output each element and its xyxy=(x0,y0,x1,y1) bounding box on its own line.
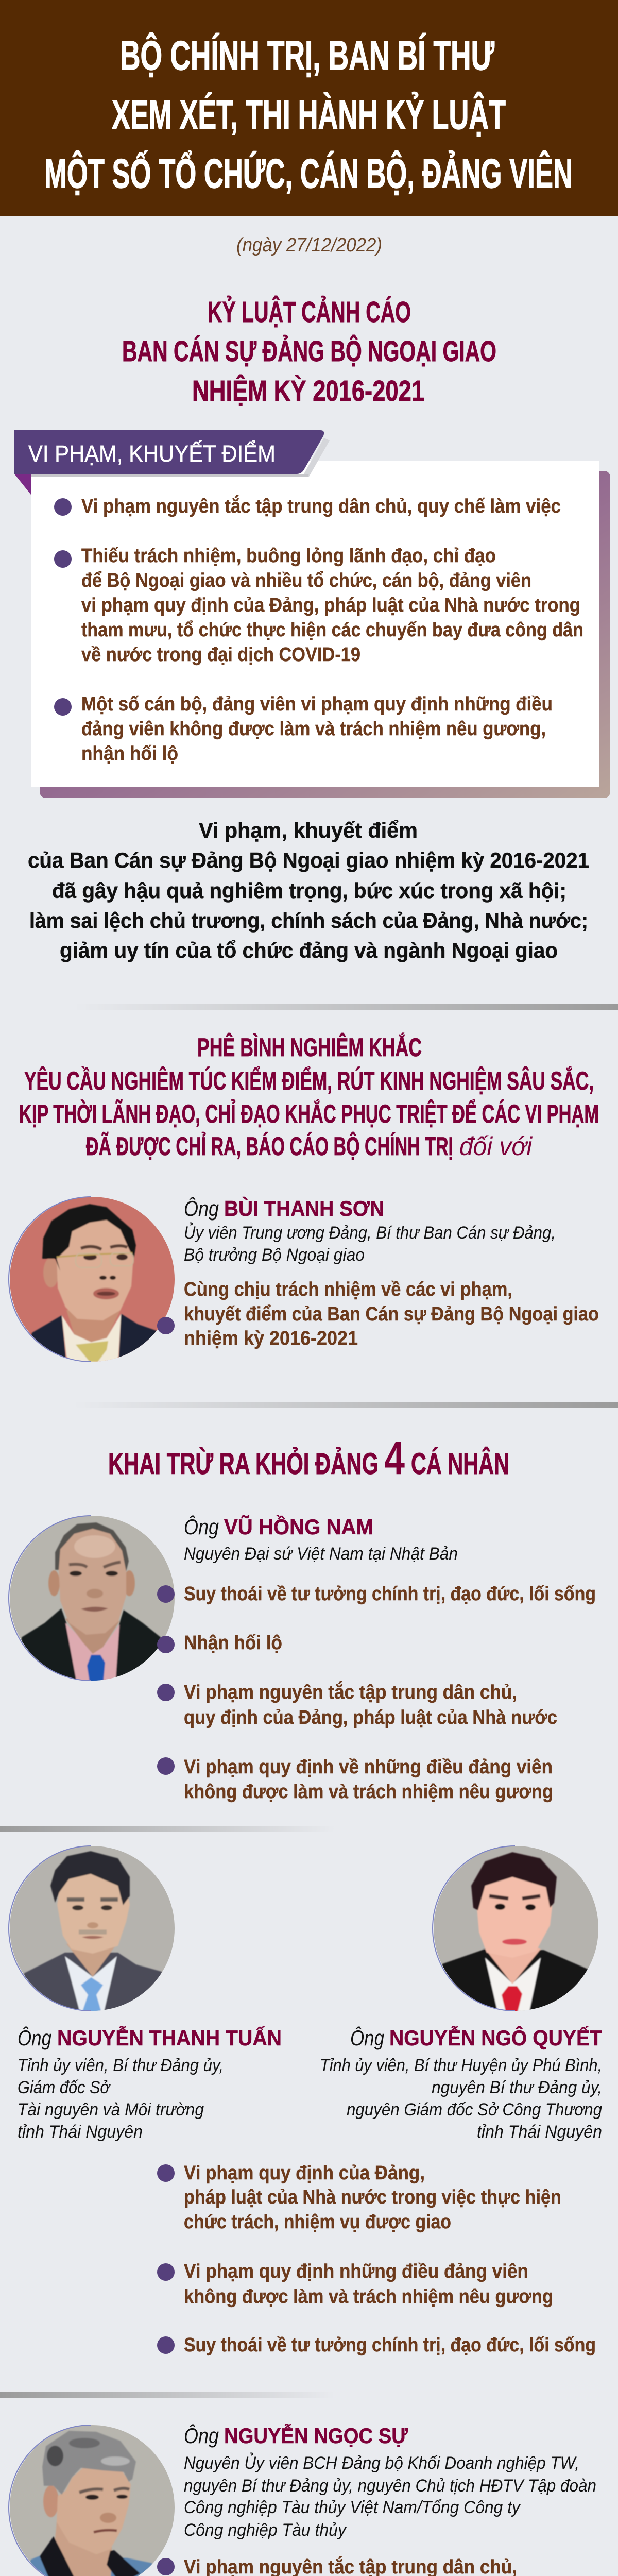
shared violations list: Vi phạm quy định của Đảng, xyxy=(184,2162,425,2184)
bullet dot on portrait xyxy=(157,1317,175,1334)
header banner xyxy=(0,0,618,216)
portrait: Nguyễn Thanh Tuấn xyxy=(8,1845,175,2011)
summary text block: của Ban Cán sự Đảng Bộ Ngoại giao nhiệm kỳ 2016-2021 xyxy=(28,848,589,872)
bullet 1: Vi phạm nguyên tắc tập trung dân chủ, quy chế làm việc xyxy=(81,495,561,517)
date: (ngày 27/12/2022) xyxy=(236,234,382,256)
person: Nguyễn Ngô Quyết: Ông xyxy=(350,2026,384,2050)
bullet 3: đảng viên không được làm và trách nhiệm nêu gương, xyxy=(81,718,546,740)
person: Nguyễn Ngô Quyết: NGUYỄN NGÔ QUYẾT xyxy=(389,2025,602,2050)
heading: khai trừ: KHAI TRỪ RA KHỎI ĐẢNG xyxy=(108,1447,379,1481)
person: Nguyễn Ngọc Sự: NGUYỄN NGỌC SỰ xyxy=(224,2423,408,2448)
bullet list: Vi phạm quy định về những điều đảng viên xyxy=(184,1756,553,1778)
heading: kỷ luật cảnh cáo: NHIỆM KỲ 2016-2021 xyxy=(192,374,424,408)
shared violations list: Vi phạm quy định những điều đảng viên xyxy=(184,2261,528,2282)
person: Vũ Hồng Nam: Nguyên Đại sứ Việt Nam tại Nhật Bản xyxy=(184,1544,458,1564)
person: Vũ Hồng Nam: Ông xyxy=(184,1515,219,1539)
ribbon fold xyxy=(14,474,31,495)
person: Nguyễn Thanh Tuấn xyxy=(18,2025,282,2142)
heading: kỷ luật cảnh cáo xyxy=(122,295,496,408)
bullet 2: vi phạm quy định của Đảng, pháp luật của Nhà nước trong xyxy=(81,595,580,616)
heading: phê bình nghiêm khắc: đối với xyxy=(459,1132,533,1161)
person: Nguyễn Ngọc Sự: nguyên Bí thư Đảng ủy, nguyên Chủ tịch HĐTV Tập đoàn xyxy=(184,2476,596,2496)
bullet list: Vi phạm nguyên tắc tập trung dân chủ, xyxy=(184,1681,517,1703)
person: Nguyễn Ngọc Sự: Ông xyxy=(184,2424,219,2448)
heading: khai trừ: 4 xyxy=(384,1433,405,1484)
bullet list: quy định của Đảng, pháp luật của Nhà nước xyxy=(184,1707,557,1728)
person: Nguyễn Thanh Tuấn: Tài nguyên và Môi trường xyxy=(18,2100,204,2120)
person: Nguyễn Thanh Tuấn: NGUYỄN THANH TUẤN xyxy=(57,2025,282,2050)
person: Nguyễn Thanh Tuấn: Ông xyxy=(18,2026,52,2050)
person: Bùi Thanh Sơn: nhiệm kỳ 2016-2021 xyxy=(184,1328,358,1349)
person: Bùi Thanh Sơn: Bộ trưởng Bộ Ngoại giao xyxy=(184,1245,365,1265)
portrait: Bùi Thanh Sơn xyxy=(8,1196,175,1362)
summary text block: làm sai lệch chủ trương, chính sách của Đảng, Nhà nước; xyxy=(29,908,588,933)
heading: kỷ luật cảnh cáo: KỶ LUẬT CẢNH CÁO xyxy=(208,295,411,329)
bullet 2: để Bộ Ngoại giao và nhiều tổ chức, cán bộ, đảng viên xyxy=(81,570,531,591)
shared violations list xyxy=(157,2162,596,2356)
person: Bùi Thanh Sơn: Ủy viên Trung ương Đảng, Bí thư Ban Cán sự Đảng, xyxy=(184,1223,556,1243)
person: Nguyễn Ngô Quyết xyxy=(320,2025,602,2142)
person: Nguyễn Ngọc Sự xyxy=(157,2423,596,2576)
summary text block: đã gây hậu quả nghiêm trọng, bức xúc trong xã hội; xyxy=(52,878,566,903)
heading: phê bình nghiêm khắc: ĐÃ ĐƯỢC CHỈ RA, BÁO CÁO BỘ CHÍNH TRỊ xyxy=(86,1131,453,1161)
person: Nguyễn Thanh Tuấn: Giám đốc Sở xyxy=(18,2078,111,2097)
summary text block xyxy=(28,818,589,962)
bullet 3 xyxy=(54,693,553,765)
person: Vũ Hồng Nam: VŨ HỒNG NAM xyxy=(224,1514,373,1539)
bullet 3: Một số cán bộ, đảng viên vi phạm quy định những điều xyxy=(81,693,553,715)
person: Bùi Thanh Sơn xyxy=(184,1196,599,1349)
panel: violations xyxy=(14,430,610,798)
portrait: Nguyễn Ngọc Sự xyxy=(5,2420,180,2576)
shared violations list: chức trách, nhiệm vụ được giao xyxy=(184,2211,451,2233)
summary text block: giảm uy tín của tổ chức đảng và ngành Ngoại giao xyxy=(60,938,558,962)
bullet 2: về nước trong đại dịch COVID-19 xyxy=(81,644,360,666)
main title xyxy=(44,32,573,196)
heading: khai trừ xyxy=(108,1433,509,1484)
tab heading: VI PHẠM, KHUYẾT ĐIỂM xyxy=(28,440,276,467)
portrait: Nguyễn Ngô Quyết xyxy=(432,1845,598,2011)
summary text block: Vi phạm, khuyết điểm xyxy=(199,818,418,842)
bullet list: Nhận hối lộ xyxy=(184,1632,282,1654)
heading: khai trừ: CÁ NHÂN xyxy=(411,1447,509,1481)
person: Nguyễn Ngô Quyết: nguyên Giám đốc Sở Công Thương xyxy=(347,2100,602,2120)
person: Nguyễn Ngọc Sự: Công nghiệp Tàu thủy xyxy=(184,2520,347,2540)
person: Nguyễn Thanh Tuấn: Tỉnh ủy viên, Bí thư Đảng ủy, xyxy=(18,2056,224,2075)
portrait: Vũ Hồng Nam xyxy=(8,1515,175,1681)
person: Bùi Thanh Sơn: Cùng chịu trách nhiệm về các vi phạm, xyxy=(184,1279,512,1300)
bullet list: không được làm và trách nhiệm nêu gương xyxy=(184,1781,553,1803)
tab heading xyxy=(14,430,324,474)
bullet 2: Thiếu trách nhiệm, buông lỏng lãnh đạo, chỉ đạo xyxy=(81,545,496,567)
person: Nguyễn Thanh Tuấn: tỉnh Thái Nguyên xyxy=(18,2122,143,2142)
bullet 2 xyxy=(54,545,583,666)
person: Bùi Thanh Sơn: Ông xyxy=(184,1196,219,1221)
person: Nguyễn Ngọc Sự: Nguyên Ủy viên BCH Đảng bộ Khối Doanh nghiệp TW, xyxy=(184,2453,579,2473)
person: Nguyễn Ngô Quyết: nguyên Bí thư Đảng ủy, xyxy=(432,2078,602,2097)
heading: phê bình nghiêm khắc xyxy=(19,1033,599,1161)
person: Nguyễn Ngọc Sự: Công nghiệp Tàu thủy Việt Nam/Tổng Công ty xyxy=(184,2498,521,2517)
bullet list xyxy=(157,1583,596,1803)
heading: phê bình nghiêm khắc: PHÊ BÌNH NGHIÊM KHẮC xyxy=(197,1033,422,1062)
person: Vũ Hồng Nam xyxy=(157,1514,596,1803)
person: Nguyễn Ngô Quyết: tỉnh Thái Nguyên xyxy=(477,2122,602,2142)
bullet 3: nhận hối lộ xyxy=(81,743,178,765)
person: Bùi Thanh Sơn: BÙI THANH SƠN xyxy=(224,1196,384,1221)
shared violations list: không được làm và trách nhiệm nêu gương xyxy=(184,2286,553,2308)
shared violations list: pháp luật của Nhà nước trong việc thực hiện xyxy=(184,2187,561,2208)
